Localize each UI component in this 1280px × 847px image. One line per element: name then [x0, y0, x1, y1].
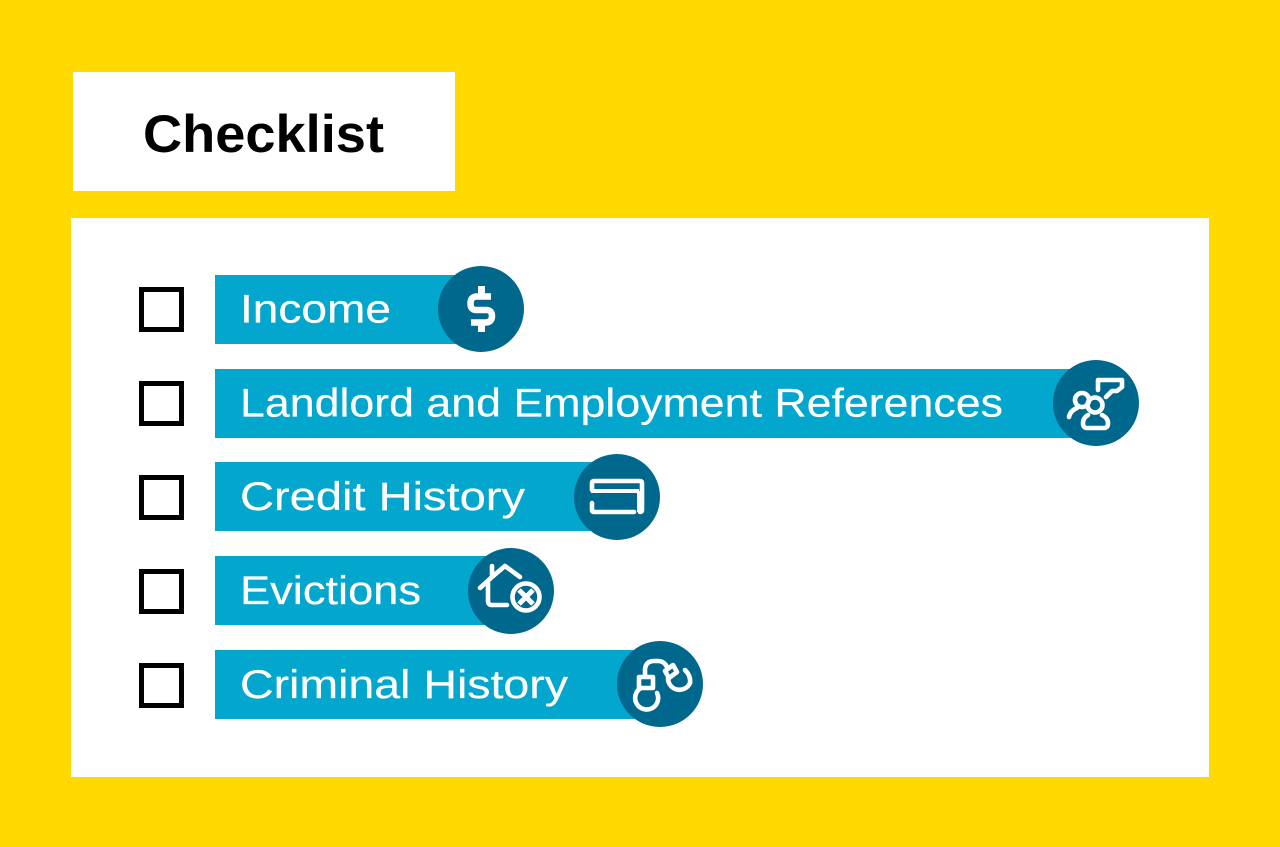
checkbox — [142, 666, 182, 706]
title: Checklist — [143, 105, 384, 164]
icon: dollar — [438, 266, 524, 352]
label: Evictions — [240, 569, 421, 613]
item: income — [142, 266, 524, 352]
checkbox — [142, 572, 182, 612]
icon: credit card — [574, 454, 660, 540]
item: references — [142, 360, 1139, 446]
label: Criminal History — [240, 663, 568, 707]
icon: handcuffs — [617, 641, 703, 727]
label bar — [215, 369, 1085, 438]
label bar — [215, 275, 475, 344]
label bar — [215, 650, 660, 719]
icon: people and speech bubble — [1053, 360, 1139, 446]
icon: house with cross — [468, 548, 554, 634]
label bar — [215, 462, 615, 531]
item: credit — [142, 454, 660, 540]
checkbox — [142, 384, 182, 424]
item: criminal — [142, 641, 703, 727]
title panel — [73, 72, 455, 191]
panel: checklist — [71, 218, 1209, 777]
checkbox — [142, 290, 182, 330]
label: Landlord and Employment References — [240, 382, 1003, 426]
label bar — [215, 556, 510, 625]
label: Income — [240, 288, 391, 332]
label: Credit History — [240, 475, 525, 519]
item: evictions — [142, 548, 554, 634]
checkbox — [142, 478, 182, 518]
